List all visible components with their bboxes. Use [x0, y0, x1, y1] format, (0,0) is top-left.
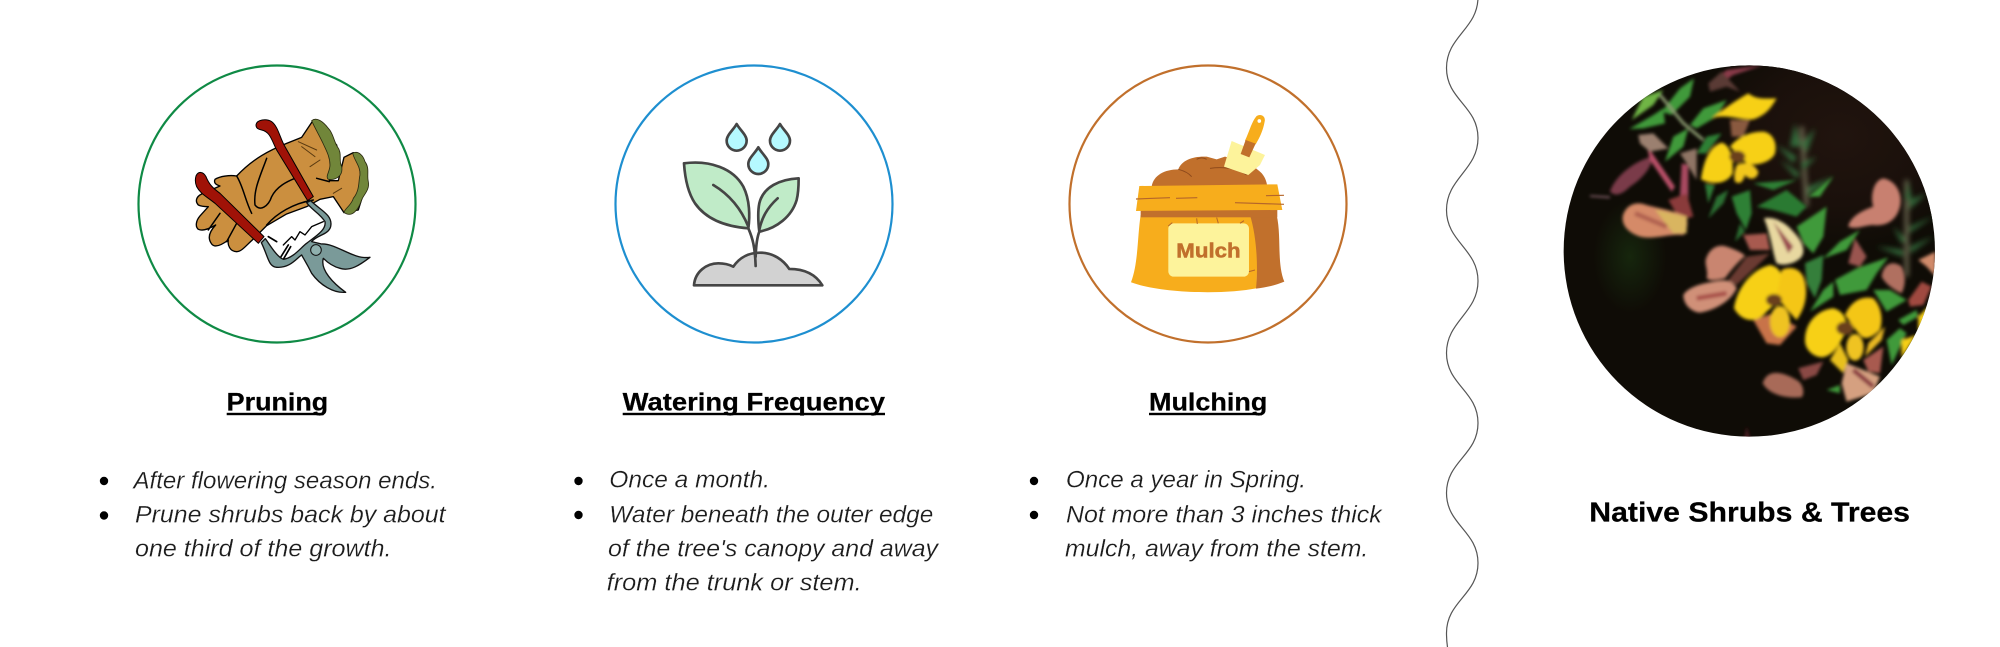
bullet list: mulching: Not more than 3 inches thick [1066, 502, 1383, 529]
icon: mulch bag with trowel: Mulch [1176, 240, 1241, 262]
photo: native flowers in circle [1564, 65, 1935, 437]
bullet list: watering frequency [574, 467, 940, 597]
panel: watering frequency [574, 66, 940, 597]
trowel [1224, 141, 1265, 175]
watering icon circle [616, 66, 892, 342]
flower centres [1729, 151, 1854, 335]
panel: pruning [100, 66, 447, 563]
yellow flowers [1701, 93, 1928, 373]
bullet list: watering frequency: Once a month. [609, 467, 770, 494]
purple buds and pink strips [1610, 157, 1652, 194]
glove cuffs [312, 119, 342, 180]
secateur spring jaw [263, 217, 327, 261]
bullet list: pruning: one third of the growth. [135, 536, 392, 563]
icon: mulch bag with trowel [1131, 115, 1284, 292]
caption: native shrubs and trees: Native Shrubs & Trees [1589, 497, 1910, 528]
icon: gloves and secateurs [195, 119, 370, 292]
wavy divider [1446, 0, 1478, 647]
bullet list: mulching: Once a year in Spring. [1066, 467, 1306, 494]
peach blooms [1623, 203, 1687, 238]
heading: pruning: Pruning [227, 389, 328, 417]
panel: mulching [1030, 66, 1383, 563]
pruning icon circle [138, 66, 416, 342]
bullet list: pruning [100, 467, 447, 563]
bullet list: watering frequency: of the tree's canopy and away [608, 536, 940, 563]
heading: watering frequency: Watering Frequency [623, 389, 885, 417]
bullet list: pruning: After flowering season ends. [132, 467, 437, 494]
bag label [1168, 223, 1249, 277]
mulching icon circle [1070, 66, 1346, 342]
heading: mulching: Mulching [1149, 389, 1267, 417]
secateur handles [256, 120, 313, 201]
green leaves [1629, 78, 1918, 393]
top stem [1722, 66, 1762, 80]
stem highlights [1660, 95, 1703, 140]
icon: seedling with water drops [684, 124, 822, 285]
secateur blades [261, 201, 370, 292]
bullet list: watering frequency: Water beneath the outer edge [609, 501, 933, 528]
bullet list: mulching [1030, 467, 1383, 563]
bullet list: pruning: Prune shrubs back by about [135, 502, 447, 529]
bullet list: watering frequency: from the trunk or stem. [607, 570, 862, 597]
blurred background stems [1777, 123, 1933, 277]
bullet list: mulching: mulch, away from the stem. [1065, 536, 1368, 563]
